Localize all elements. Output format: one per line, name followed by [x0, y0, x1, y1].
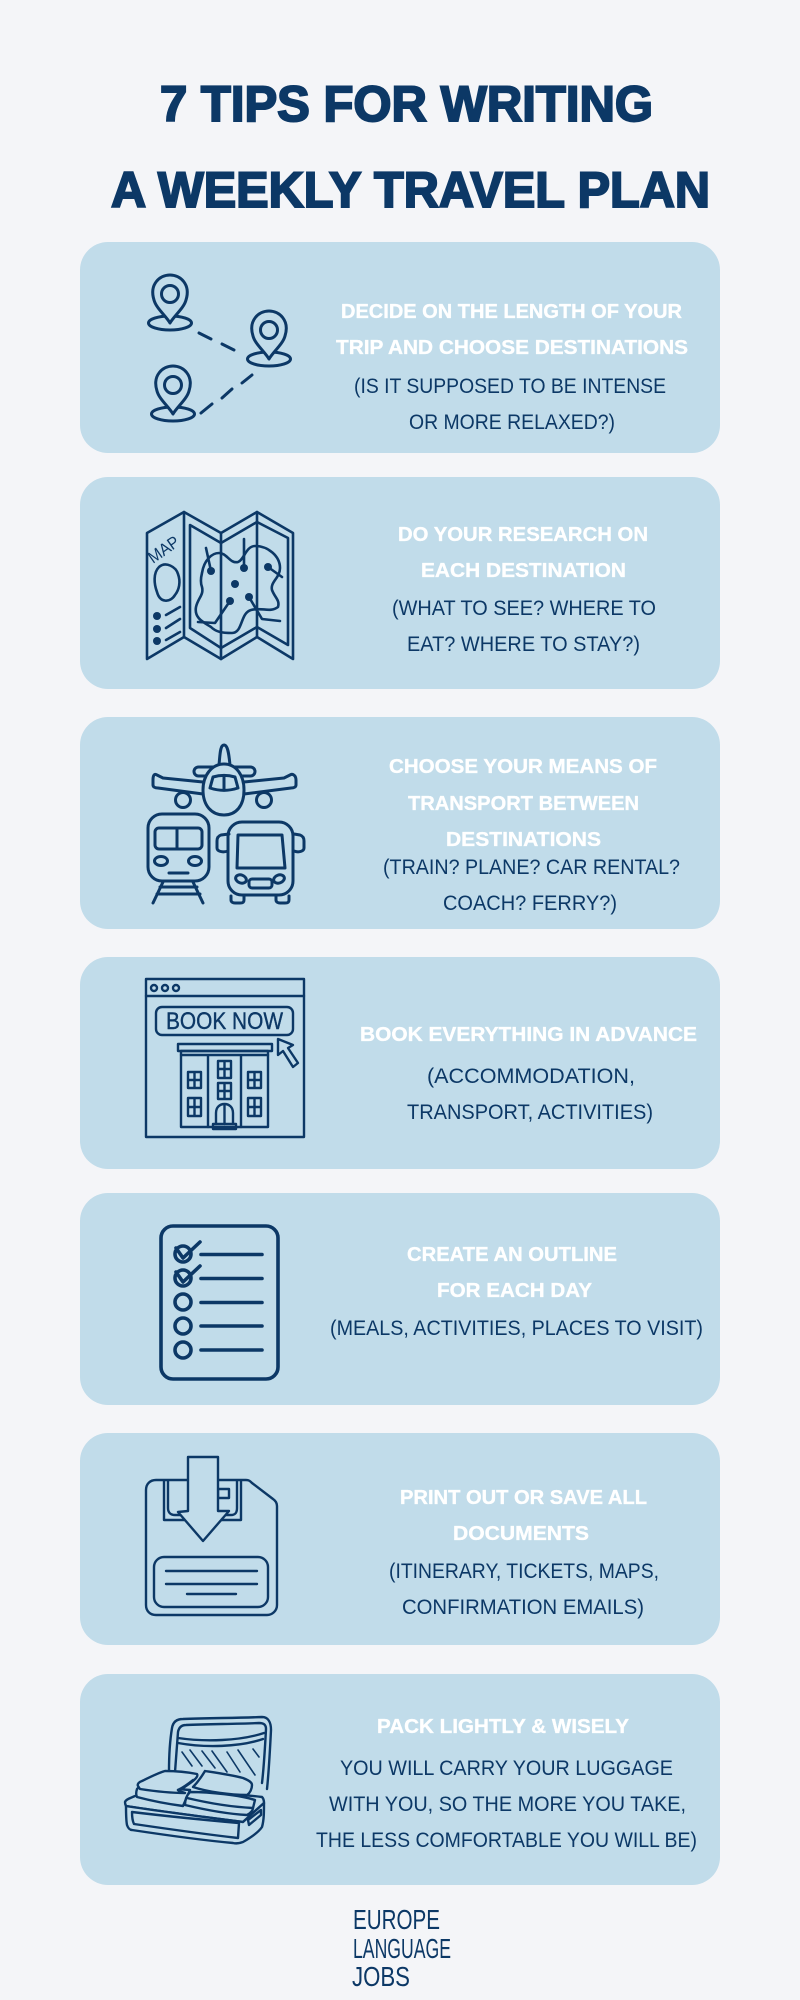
text: tip 2 detail: EAT? WHERE TO STAY?)	[407, 633, 640, 656]
panel: tip 3 transport	[80, 717, 720, 929]
text: tip 1 detail: OR MORE RELAXED?)	[409, 411, 615, 434]
text: tip 5 detail: (MEALS, ACTIVITIES, PLACES TO VISIT)	[330, 1317, 703, 1340]
heading: tip 2: EACH DESTINATION	[421, 559, 626, 582]
icon: three map pins joined by dashed lines	[148, 275, 290, 421]
title: A WEEKLY TRAVEL PLAN	[111, 162, 710, 218]
text: tip 3 detail: COACH? FERRY?)	[443, 892, 617, 915]
logo: Europe Language Jobs: JOBS	[352, 1961, 410, 1992]
heading: tip 5	[407, 1243, 617, 1302]
heading: tip 3: CHOOSE YOUR MEANS OF	[389, 755, 657, 778]
heading: tip 6	[400, 1486, 647, 1545]
heading: tip 6: PRINT OUT OR SAVE ALL	[400, 1486, 647, 1509]
text: tip 2 detail: (WHAT TO SEE? WHERE TO	[392, 597, 656, 620]
text: tip 6 detail	[389, 1560, 659, 1619]
icon: checklist	[161, 1226, 278, 1379]
heading: tip 3: TRANSPORT BETWEEN	[408, 792, 639, 815]
heading: tip 6: DOCUMENTS	[453, 1522, 589, 1545]
icon: save floppy with download arrow	[146, 1457, 277, 1615]
text: tip 4 detail: (ACCOMMODATION,	[427, 1065, 635, 1088]
text: tip 7 detail	[316, 1757, 697, 1852]
panel: tip 5 outline	[80, 1193, 720, 1405]
text: tip 1 detail: (IS IT SUPPOSED TO BE INTENSE	[354, 375, 666, 398]
panel: tip 1 destinations	[80, 242, 720, 453]
heading: tip 1	[336, 300, 688, 359]
heading: tip 1: TRIP AND CHOOSE DESTINATIONS	[336, 336, 688, 359]
text: tip 6 detail: CONFIRMATION EMAILS)	[402, 1596, 644, 1619]
heading: tip 7: PACK LIGHTLY & WISELY	[377, 1715, 629, 1738]
icon: browser window with book now button and hotel: BOOK NOW	[166, 1008, 283, 1035]
panel: tip 2 research	[80, 477, 720, 689]
text: tip 3 detail: (TRAIN? PLANE? CAR RENTAL?	[383, 856, 680, 879]
text: tip 1 detail	[354, 375, 666, 434]
icon: folded map	[144, 512, 293, 659]
text: tip 7 detail: WITH YOU, SO THE MORE YOU TAKE,	[329, 1793, 686, 1816]
panel: tip 4 booking	[80, 957, 720, 1169]
panel: tip 6 documents	[80, 1433, 720, 1645]
title	[111, 76, 710, 218]
text: tip 3 detail	[383, 856, 680, 915]
icon: browser window with book now button and hotel	[146, 979, 304, 1137]
heading: tip 3: DESTINATIONS	[446, 828, 601, 851]
logo: Europe Language Jobs	[352, 1904, 451, 1992]
heading: tip 3	[389, 755, 657, 851]
text: tip 4 detail	[407, 1065, 653, 1124]
icon: open suitcase with folded clothes	[125, 1717, 271, 1843]
text: tip 4 detail: TRANSPORT, ACTIVITIES)	[407, 1101, 653, 1124]
logo: Europe Language Jobs: EUROPE	[353, 1904, 440, 1935]
heading: tip 4: BOOK EVERYTHING IN ADVANCE	[360, 1023, 697, 1046]
heading: tip 5: FOR EACH DAY	[437, 1279, 592, 1302]
text: tip 7 detail: YOU WILL CARRY YOUR LUGGAGE	[340, 1757, 673, 1780]
heading: tip 2	[398, 523, 648, 582]
panel: tip 7 packing	[80, 1674, 720, 1885]
text: tip 7 detail: THE LESS COMFORTABLE YOU WILL BE)	[316, 1829, 697, 1852]
icon: folded map: MAP	[144, 532, 183, 567]
logo: Europe Language Jobs: LANGUAGE	[353, 1933, 451, 1964]
text: tip 2 detail	[392, 597, 656, 656]
title: 7 TIPS FOR WRITING	[160, 76, 653, 132]
icon: plane, train and coach	[148, 745, 304, 903]
heading: tip 2: DO YOUR RESEARCH ON	[398, 523, 648, 546]
text: tip 6 detail: (ITINERARY, TICKETS, MAPS,	[389, 1560, 659, 1583]
heading: tip 5: CREATE AN OUTLINE	[407, 1243, 617, 1266]
heading: tip 1: DECIDE ON THE LENGTH OF YOUR	[341, 300, 682, 323]
